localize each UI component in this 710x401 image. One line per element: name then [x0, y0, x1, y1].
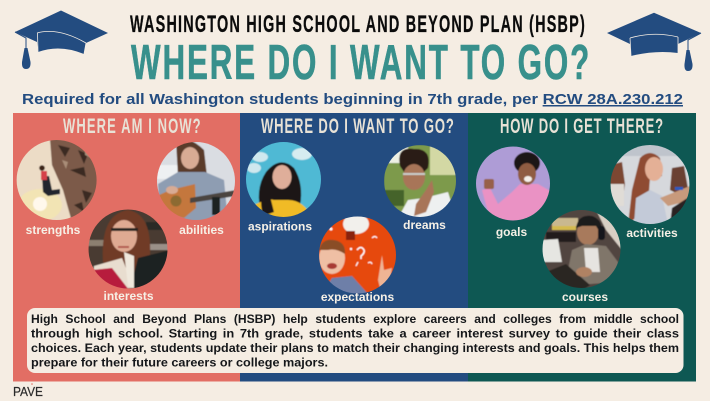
panel: where am I now — [13, 113, 240, 382]
callout: description text box — [27, 308, 684, 373]
panel: where do I want to go — [240, 113, 468, 382]
subtitle: Required for all Washington students beginning in 7th grade, per RCW 28A.230.212 — [22, 91, 683, 108]
label: goals: goals — [496, 225, 527, 239]
heading: how do I get there: HOW DO I GET THERE? — [500, 114, 663, 138]
photo: young person daydreaming — [384, 145, 457, 218]
label: activities: activities — [626, 226, 678, 240]
photo: girl with guitar — [156, 139, 236, 222]
photo: boy with question marks — [318, 214, 398, 296]
label: strengths: strengths — [26, 223, 81, 237]
heading: where do I want to go: WHERE DO I WANT TO GO? — [261, 114, 454, 138]
logo: PAVE: PAVE — [13, 384, 43, 399]
label: aspirations: aspirations — [248, 220, 312, 234]
icon: graduation cap right — [607, 13, 701, 71]
callout: description text box: choices. Each year, students update their plans to match their changing interests and goals. This helps them — [31, 342, 679, 355]
photo: woman looking up at sky — [245, 141, 323, 220]
title: main heading: WHERE DO I WANT TO GO? — [131, 35, 589, 90]
photo: girl reading — [88, 209, 170, 290]
heading: where am I now: WHERE AM I NOW? — [63, 114, 201, 138]
label: abilities: abilities — [179, 223, 224, 237]
label: courses: courses — [562, 290, 608, 304]
photo: students in classroom — [610, 144, 692, 225]
photo: student with headphones at laptop — [542, 210, 620, 288]
title: program name: WASHINGTON HIGH SCHOOL AND BEYOND PLAN (HSBP) — [130, 11, 585, 38]
photo: cheering student in pink hoodie — [475, 146, 552, 222]
icon: graduation cap left — [15, 10, 108, 69]
label: expectations: expectations — [321, 290, 395, 304]
callout: description text box: prepare for their future careers or college majors. — [31, 356, 328, 370]
panel: how do I get there — [468, 113, 696, 382]
callout: description text box: through high school. Starting in 7th grade, students take a career interest survey to guide their class — [31, 328, 679, 340]
label: interests: interests — [103, 289, 154, 303]
label: dreams: dreams — [403, 218, 446, 232]
photo: rock climber — [16, 139, 99, 222]
callout: description text box: High School and Beyond Plans (HSBP) help students explore careers and colleges from middle school — [31, 313, 679, 326]
